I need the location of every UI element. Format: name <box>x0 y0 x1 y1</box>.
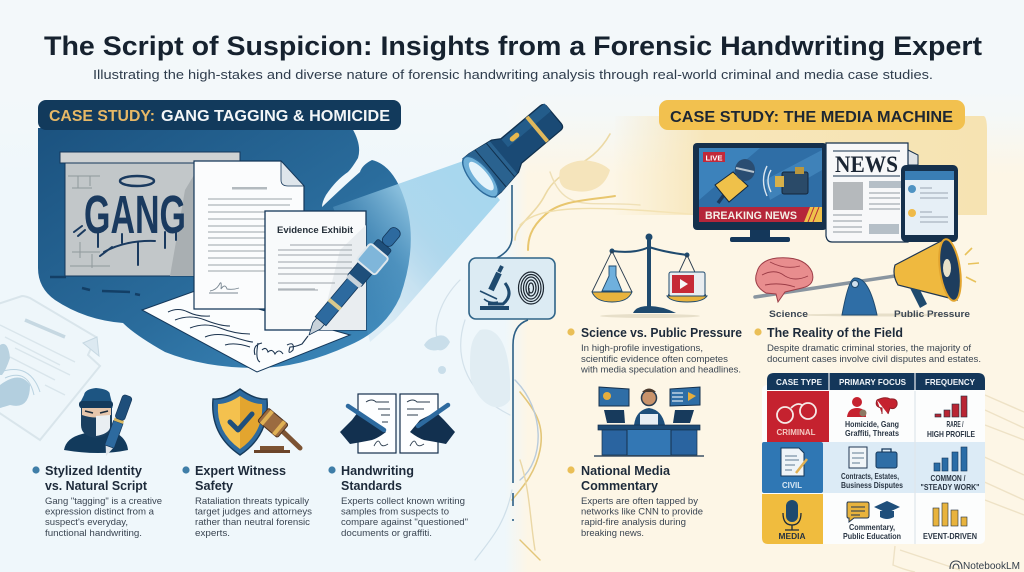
flashlight beam <box>333 160 500 342</box>
television <box>693 143 827 242</box>
faint background document left <box>0 296 100 440</box>
text block: samples from suspects to <box>341 506 449 516</box>
heading: gang case study <box>38 100 401 130</box>
text block <box>341 464 468 538</box>
text block: breaking news. <box>581 527 644 538</box>
text block: National Media <box>581 464 671 478</box>
text block: target judges and attorneys <box>195 506 312 516</box>
television: LIVE <box>706 154 722 162</box>
evidence exhibit sheet <box>265 211 366 330</box>
column: reality of the field <box>754 238 981 364</box>
icon: microphone <box>715 159 755 203</box>
connector line <box>497 185 528 521</box>
case type table <box>762 373 985 544</box>
brick wall with graffiti <box>50 152 240 295</box>
row: media: MEDIA <box>778 532 806 541</box>
column: stylized identity <box>32 388 162 538</box>
text block: In high-profile investigations, <box>581 342 703 353</box>
tablet <box>901 165 958 242</box>
text block: functional handwriting. <box>45 527 142 538</box>
media illustration: tv, newspaper and tablet <box>693 143 958 242</box>
row: civil: "STEADY WORK" <box>920 483 980 492</box>
blue ink blob <box>38 128 411 368</box>
panel: gang tagging scene <box>38 128 500 372</box>
bullet <box>32 466 40 474</box>
text block: Stylized Identity <box>45 464 142 478</box>
heading: gang case study: GANG TAGGING & HOMICIDE <box>161 108 390 125</box>
icon: fingerprint <box>518 272 544 304</box>
icon: studio microphone <box>783 500 801 530</box>
text block: Safety <box>195 479 233 493</box>
text block: Science vs. Public Pressure <box>581 326 742 340</box>
column: science vs public pressure <box>567 234 742 374</box>
text block: Experts are often tapped by <box>581 495 698 506</box>
column: national media commentary <box>567 387 704 538</box>
bar chart: common <box>934 447 967 471</box>
text block: networks like CNN to provide <box>581 506 703 516</box>
table header: PRIMARY FOCUS <box>839 377 906 387</box>
text block: documents or graffiti. <box>341 527 432 538</box>
text block: vs. Natural Script <box>45 479 148 493</box>
icon: camera <box>764 166 808 196</box>
row: civil: CIVIL <box>782 481 802 490</box>
row: civil: Contracts, Estates, <box>841 472 899 481</box>
row: civil: Business Disputes <box>841 481 903 490</box>
title: The Script of Suspicion: Insights from a Forensic Handwriting Expert <box>44 31 982 61</box>
faint background document right <box>893 395 1024 572</box>
text block: expression distinct from a <box>45 506 155 516</box>
fountain pen <box>300 222 407 343</box>
icon: shield and gavel <box>213 389 300 455</box>
watercolor stains <box>424 116 987 407</box>
row: civil <box>762 442 980 493</box>
column: expert witness safety <box>182 389 312 538</box>
bullet <box>567 328 575 336</box>
newspaper <box>826 143 918 242</box>
row: civil band <box>823 442 985 493</box>
brick wall with graffiti: GANG <box>84 185 186 245</box>
icon box: microscope and fingerprint <box>469 258 555 319</box>
row: criminal: CRIMINAL <box>776 428 816 437</box>
text block: Commentary <box>581 479 658 493</box>
text block: suspect's everyday, <box>45 516 128 527</box>
text block: document cases involve civil disputes and estates. <box>767 353 981 364</box>
text block <box>195 464 312 538</box>
row: media: Public Education <box>843 532 901 541</box>
column: handwriting standards <box>328 394 468 538</box>
text block: The Reality of the Field <box>767 326 903 340</box>
text block <box>580 326 742 374</box>
heading: media case study <box>659 100 965 130</box>
text block: Expert Witness <box>195 464 286 478</box>
text block: scientific evidence often competes <box>581 353 728 364</box>
document with signature <box>194 161 304 309</box>
text block <box>581 464 703 538</box>
icon: seesaw with brain and megaphone <box>755 238 979 316</box>
icon: person and graffiti splat <box>847 397 897 417</box>
icon: masked suspect with pen <box>64 388 133 458</box>
text block: experts. <box>195 527 230 538</box>
text block: compare against "questioned" <box>341 516 468 527</box>
icon: news anchor desk <box>594 387 704 456</box>
text block: rapid-fire analysis during <box>581 516 686 527</box>
text block: Experts collect known writing <box>341 495 465 506</box>
table header: FREQUENCY <box>925 377 975 387</box>
bullet <box>328 466 336 474</box>
label: science: Science <box>769 309 808 320</box>
row: criminal <box>767 391 975 442</box>
text block: Despite dramatic criminal stories, the majority of <box>767 342 971 353</box>
subtitle: Illustrating the high-stakes and diverse nature of forensic handwriting analysis through real-world criminal and media case studies. <box>93 67 933 82</box>
bullet <box>754 328 762 336</box>
label: public pressure: Public Pressure <box>894 309 970 320</box>
row: civil: COMMON / <box>930 474 966 483</box>
text block: Standards <box>341 479 402 493</box>
icon: scale of justice <box>592 234 707 318</box>
row: media <box>762 494 977 544</box>
text block: Rataliation threats typically <box>195 495 309 506</box>
row: media: EVENT-DRIVEN <box>923 532 977 541</box>
icon: microscope <box>480 266 509 310</box>
icon: speech bubble and graduation cap <box>847 501 900 522</box>
evidence exhibit sheet: Evidence Exhibit <box>277 225 353 235</box>
icon: document and pen <box>781 448 807 476</box>
table header: CASE TYPE <box>776 377 822 387</box>
bullet <box>182 466 190 474</box>
heading: gang case study: CASE STUDY: <box>49 108 155 125</box>
row: criminal: Homicide, Gang <box>845 420 899 429</box>
bar chart: event driven <box>933 503 967 526</box>
row: criminal: RARE / <box>946 420 964 429</box>
heading: media case study: CASE STUDY: THE MEDIA MACHINE <box>670 109 953 126</box>
handwritten letter <box>142 291 350 372</box>
table header <box>767 373 985 390</box>
text block: rather than neutral forensic <box>195 516 310 527</box>
row: criminal: HIGH PROFILE <box>927 430 975 439</box>
icon: hands writing on two documents <box>340 394 455 453</box>
watermark: NotebookLM: NotebookLM <box>963 560 1020 572</box>
television: BREAKING NEWS <box>705 210 797 222</box>
text block: Gang "tagging" is a creative <box>45 495 162 506</box>
text block: Handwriting <box>341 464 414 478</box>
bullet <box>567 466 575 474</box>
icon: flashlight <box>457 96 570 202</box>
decorative flowing curves <box>436 134 700 560</box>
icon: handcuffs <box>777 403 816 423</box>
bar chart: rare <box>935 396 967 417</box>
row: criminal: Graffiti, Threats <box>845 429 899 438</box>
icon: clipboard and briefcase <box>849 447 897 468</box>
text block <box>767 326 981 364</box>
newspaper: NEWS <box>835 152 898 177</box>
row: media: Commentary, <box>849 523 895 532</box>
text block <box>45 464 162 538</box>
text block: with media speculation and headlines. <box>580 364 741 374</box>
